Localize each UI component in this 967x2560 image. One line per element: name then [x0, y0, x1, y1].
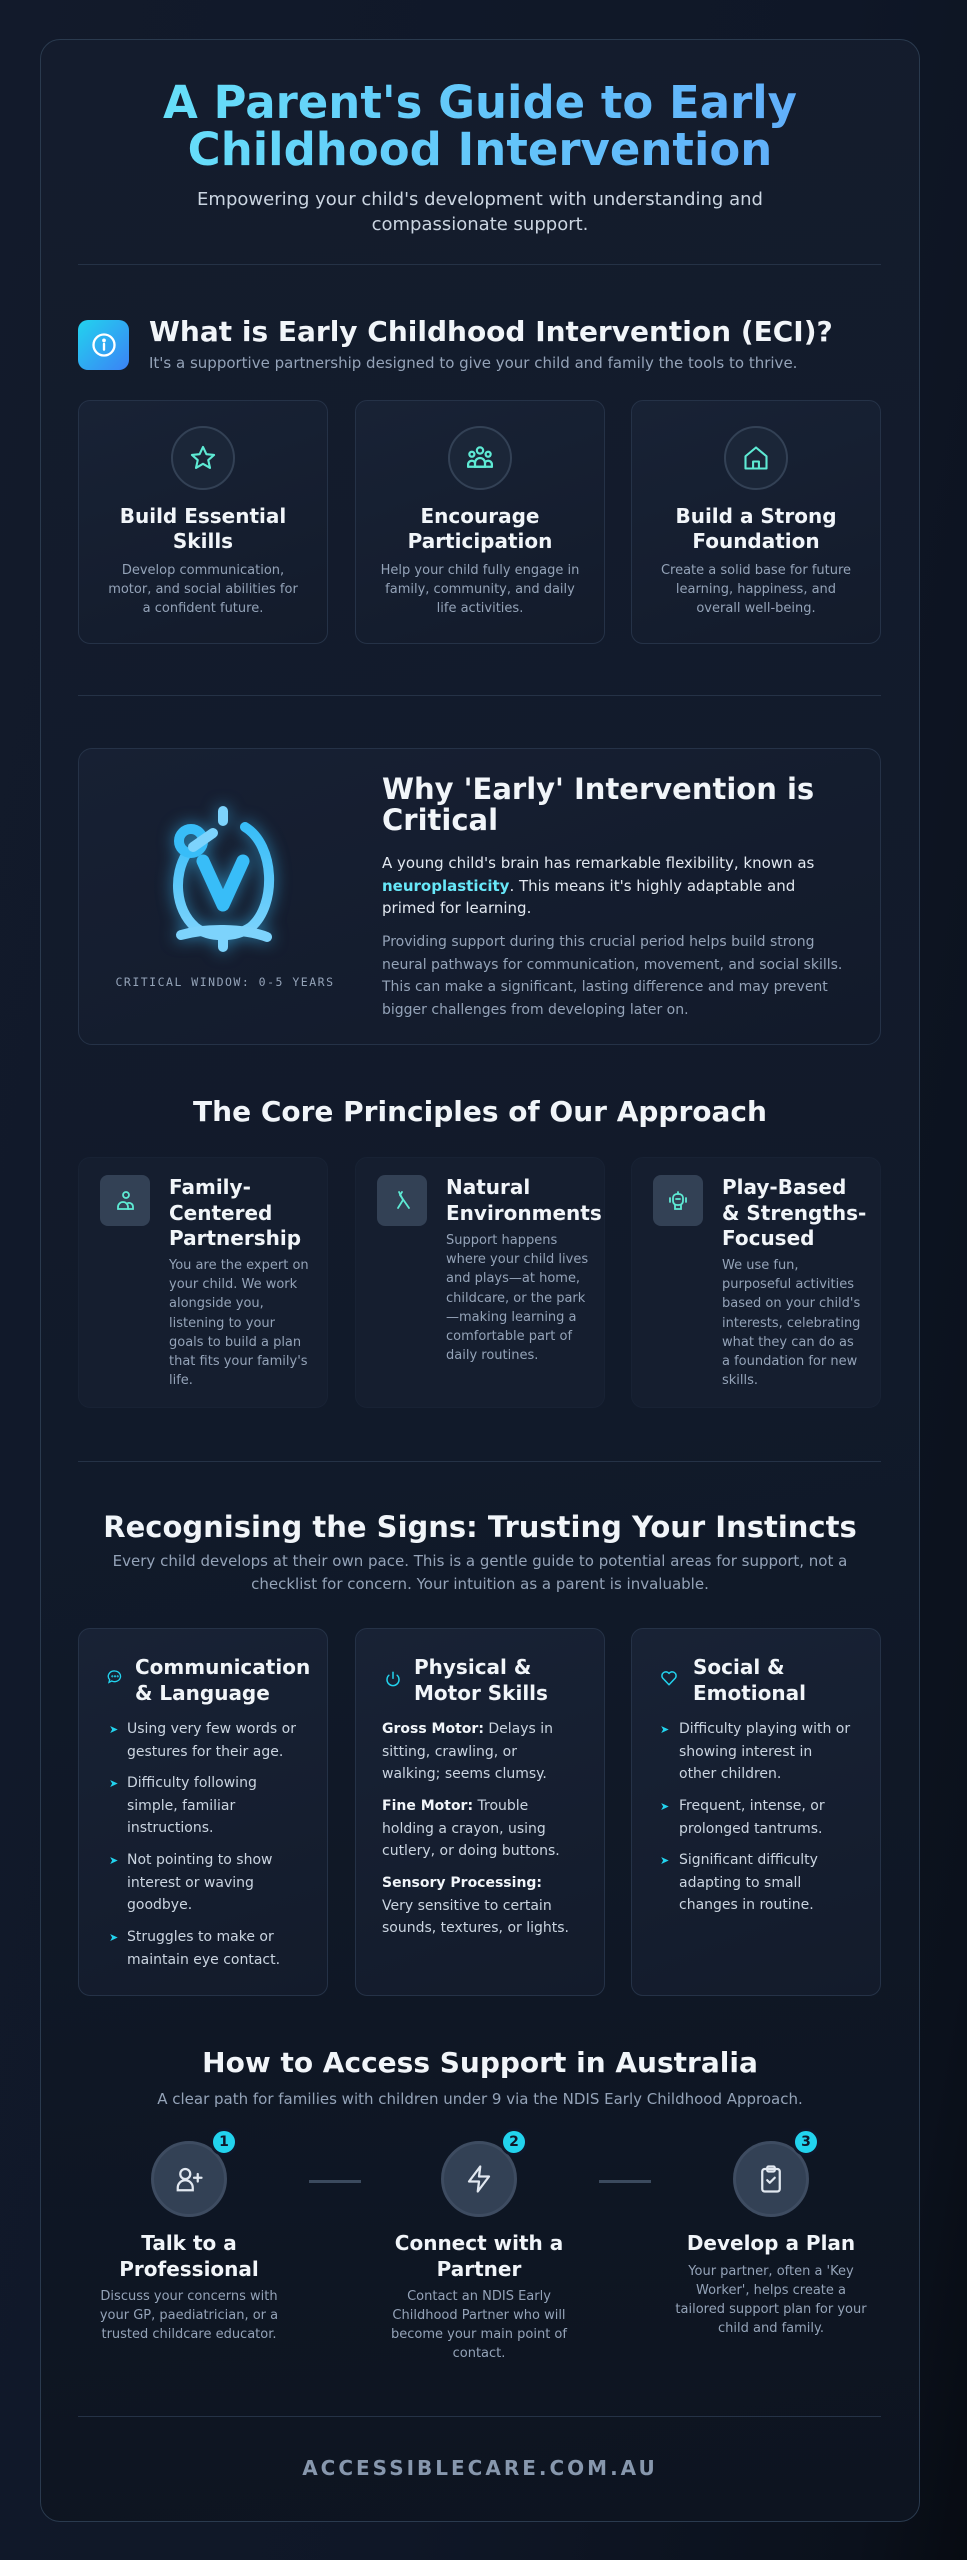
card: physical: cutlery, or doing buttons. — [382, 1843, 560, 1859]
step 1 icon: 1 — [219, 2134, 229, 2150]
subheading: signs — [113, 1552, 847, 1593]
heading: access support: How to Access Support in Australia — [202, 2046, 758, 2079]
card: build essential skills — [78, 400, 328, 644]
card: natural environments: Environments — [446, 1200, 602, 1224]
footer: ACCESSIBLECARE.COM.AU — [302, 2456, 658, 2480]
card: social: Frequent, intense, or — [679, 1798, 825, 1814]
step 2 text: Contact an NDIS Early — [407, 2289, 551, 2304]
step 1 icon — [151, 2141, 227, 2217]
step 2 icon — [441, 2141, 517, 2217]
title: A Parent's Guide to Early — [163, 76, 797, 129]
card: build essential skills: motor, and social abilities for — [108, 582, 298, 597]
heading: ECI: What is Early Childhood Intervention (ECI)? — [149, 315, 833, 348]
card: natural environments: comfortable part of — [446, 1329, 572, 1344]
title — [40, 79, 920, 173]
step 2 text: Childhood Partner who will — [392, 2308, 566, 2323]
step 2 text — [391, 2231, 568, 2361]
card: strong foundation: Foundation — [692, 529, 820, 553]
card: communication: simple, familiar — [127, 1798, 235, 1814]
icon: heart — [661, 1671, 677, 1686]
card: natural environments: where your child lives — [446, 1252, 588, 1267]
card: communication — [78, 1628, 328, 1996]
card: natural environments: —making learning a — [446, 1310, 577, 1325]
heading: why early: Critical — [382, 803, 498, 837]
card: physical: Sensory Processing: — [382, 1875, 542, 1891]
card: physical: sitting, crawling, or — [382, 1744, 517, 1760]
card: encourage participation: Encourage — [420, 504, 539, 528]
step 1 text: Talk to a — [141, 2231, 237, 2255]
icon: person — [100, 1175, 150, 1226]
card: build essential skills: a confident future. — [143, 601, 263, 616]
icon: house — [724, 426, 788, 490]
card: social: showing interest in — [679, 1744, 812, 1760]
card: play-based: We use fun, — [722, 1258, 799, 1273]
card: communication: goodbye. — [127, 1897, 192, 1913]
subheading: signs: checklist for concern. Your intuition as a parent is invaluable. — [251, 1575, 709, 1593]
step 2 text: become your main point of — [391, 2327, 567, 2342]
card: social: Difficulty playing with or — [679, 1721, 850, 1737]
card: strong foundation: overall well-being. — [696, 601, 816, 616]
title: Childhood Intervention — [188, 123, 772, 176]
card: physical: Physical & — [414, 1655, 531, 1679]
card: build essential skills: Skills — [173, 529, 233, 553]
card: physical: Fine Motor: Trouble — [382, 1798, 528, 1814]
card: social: ➤ — [660, 1723, 669, 1736]
heading: recognising the signs: Recognising the Signs: Trusting Your Instincts — [103, 1510, 857, 1544]
card: family-centered: Partnership — [169, 1226, 301, 1250]
card: communication: Struggles to make or — [127, 1929, 274, 1945]
step 3 text: Develop a Plan — [687, 2231, 855, 2255]
icon: toy — [653, 1175, 703, 1226]
card: communication: ➤ — [109, 1723, 118, 1736]
card: natural environments: daily routines. — [446, 1348, 538, 1363]
step 2 icon: 2 — [509, 2134, 519, 2150]
card: play-based: purposeful activities — [722, 1277, 854, 1292]
card: social: other children. — [679, 1766, 781, 1782]
card: strong foundation: Create a solid base for future — [661, 563, 851, 578]
card: physical: walking; seems clumsy. — [382, 1766, 547, 1782]
card: family-centered: listening to your — [169, 1316, 275, 1331]
card: communication: maintain eye contact. — [127, 1952, 280, 1968]
icon: people — [448, 426, 512, 490]
card: communication: & Language — [135, 1681, 270, 1705]
card: social: ➤ — [660, 1854, 669, 1867]
card: physical: Gross Motor: Delays in — [382, 1721, 553, 1737]
subheading: It's a supportive partnership designed to give your child and family the tools to thrive. — [149, 354, 797, 372]
card: social: changes in routine. — [679, 1897, 814, 1913]
card: social: adapting to small — [679, 1875, 801, 1891]
card: family-centered: Family- — [169, 1175, 251, 1199]
card: encourage participation: Participation — [408, 529, 552, 553]
card: family-centered — [78, 1157, 328, 1408]
card: social — [631, 1628, 881, 1996]
icon: power — [386, 1672, 400, 1686]
card: social: Emotional — [693, 1681, 806, 1705]
subtitle: Empowering your child's development with understanding and — [197, 189, 763, 210]
card: play-based: & Strengths- — [722, 1200, 866, 1224]
card: natural environments: and plays—at home, — [446, 1271, 580, 1286]
card: family-centered: your child. We work — [169, 1277, 297, 1292]
card: encourage participation: Help your child fully engage in — [381, 563, 579, 578]
step 3 text: child and family. — [718, 2321, 824, 2336]
card: physical: Very sensitive to certain — [382, 1898, 552, 1914]
card: play-based: skills. — [722, 1373, 758, 1388]
step 1 text: Professional — [119, 2257, 259, 2281]
subheading: access: A clear path for families with children under 9 via the NDIS Early Childhood Approach. — [157, 2090, 803, 2108]
subtitle: compassionate support. — [372, 214, 588, 235]
arrow: connector 2 — [599, 2180, 651, 2183]
step 2 text: Connect with a — [395, 2231, 563, 2255]
step 3 text: Your partner, often a 'Key — [688, 2264, 854, 2279]
card: play-based: Focused — [722, 1226, 814, 1250]
step 3 icon — [733, 2141, 809, 2217]
card: play-based: what they can do as — [722, 1335, 854, 1350]
card: encourage participation: family, community, and daily — [385, 582, 575, 597]
card: physical: sounds, textures, or lights. — [382, 1920, 569, 1936]
subheading: signs: Every child develops at their own pace. This is a gentle guide to potential areas for support, not a — [113, 1552, 847, 1570]
card: communication: ➤ — [109, 1931, 118, 1944]
heading: core principles: The Core Principles of Our Approach — [193, 1095, 767, 1128]
icon: info — [78, 320, 129, 370]
step 3 text: tailored support plan for your — [675, 2302, 867, 2317]
card: physical: holding a crayon, using — [382, 1821, 546, 1837]
card: family-centered: life. — [169, 1373, 193, 1388]
step 3 text: Worker', helps create a — [696, 2283, 846, 2298]
card: communication: ➤ — [109, 1854, 118, 1867]
card: natural environments: Support happens — [446, 1233, 557, 1248]
step 3 text — [675, 2231, 867, 2336]
card: communication: Difficulty following — [127, 1775, 257, 1791]
card: communication: Using very few words or — [127, 1721, 296, 1737]
card: encourage participation — [355, 400, 605, 644]
text: neuroplasticity: A young child's brain has remarkable flexibility, known as — [382, 854, 814, 872]
card: communication: Not pointing to show — [127, 1852, 272, 1868]
card: communication: gestures for their age. — [127, 1744, 283, 1760]
text: support: neural pathways for communication, movement, and social skills. — [382, 956, 842, 972]
caption: critical window: CRITICAL WINDOW: 0-5 YEARS — [115, 975, 334, 989]
text: support: Providing support during this crucial period helps build strong — [382, 934, 815, 950]
card: build essential skills: Build Essential — [120, 504, 286, 528]
card: family-centered: Centered — [169, 1200, 272, 1224]
step 1 text: trusted childcare educator. — [101, 2327, 277, 2342]
icon: stopwatch brain — [162, 800, 285, 958]
card: build essential skills: Develop communication, — [122, 563, 284, 578]
step 1 text: Discuss your concerns with — [100, 2289, 278, 2304]
step 3 icon: 3 — [801, 2134, 811, 2150]
step 2 text: Partner — [437, 2257, 521, 2281]
card: play-based: Play-Based — [722, 1175, 846, 1199]
card: communication: Communication — [135, 1655, 310, 1679]
card: family-centered: that fits your family's — [169, 1354, 308, 1369]
heading: why early: Why 'Early' Intervention is — [382, 772, 814, 806]
card: physical — [355, 1628, 605, 1996]
panel: why early intervention — [78, 748, 881, 1045]
card: physical: Motor Skills — [414, 1681, 548, 1705]
step 2 text: contact. — [453, 2346, 505, 2361]
card: communication: interest or waving — [127, 1875, 254, 1891]
card: family-centered: You are the expert on — [169, 1258, 309, 1273]
card: social: Social & — [693, 1655, 785, 1679]
card: play-based: a foundation for new — [722, 1354, 857, 1369]
card: encourage participation: life activities. — [437, 601, 523, 616]
card: social: prolonged tantrums. — [679, 1821, 823, 1837]
icon: ribbon — [377, 1175, 427, 1226]
card: family-centered: goals to build a plan — [169, 1335, 301, 1350]
card: natural environments: Natural — [446, 1175, 530, 1199]
card: communication: ➤ — [109, 1777, 118, 1790]
icon: star — [171, 426, 235, 490]
subtitle — [197, 189, 763, 235]
card: family-centered: alongside you, — [169, 1296, 264, 1311]
card: strong foundation: Build a Strong — [675, 504, 837, 528]
card: communication: instructions. — [127, 1820, 213, 1836]
section: what is ECI — [78, 315, 833, 372]
text: support: bigger challenges from developing later on. — [382, 1002, 689, 1018]
card: strong foundation — [631, 400, 881, 644]
text: neuroplasticity — [382, 854, 814, 917]
card: social: Significant difficulty — [679, 1852, 818, 1868]
card: strong foundation: learning, happiness, and — [676, 582, 836, 597]
card: play-based: interests, celebrating — [722, 1316, 860, 1331]
card: play-based — [631, 1157, 881, 1408]
text: neuroplasticity: neuroplasticity. This means it's highly adaptable and — [382, 876, 795, 894]
card: natural environments — [355, 1157, 605, 1408]
text: support: This can make a significant, lasting difference and may prevent — [382, 979, 828, 995]
card: natural environments: childcare, or the park — [446, 1291, 585, 1306]
text: support — [382, 934, 842, 1018]
card: play-based: based on your child's — [722, 1296, 860, 1311]
icon: chat — [108, 1670, 122, 1684]
step 1 text — [100, 2231, 278, 2342]
heading: why early — [382, 772, 814, 837]
text: neuroplasticity: primed for learning. — [382, 899, 531, 917]
arrow: connector 1 — [309, 2180, 361, 2183]
step 1 text: your GP, paediatrician, or a — [100, 2308, 278, 2323]
card: social: ➤ — [660, 1800, 669, 1813]
